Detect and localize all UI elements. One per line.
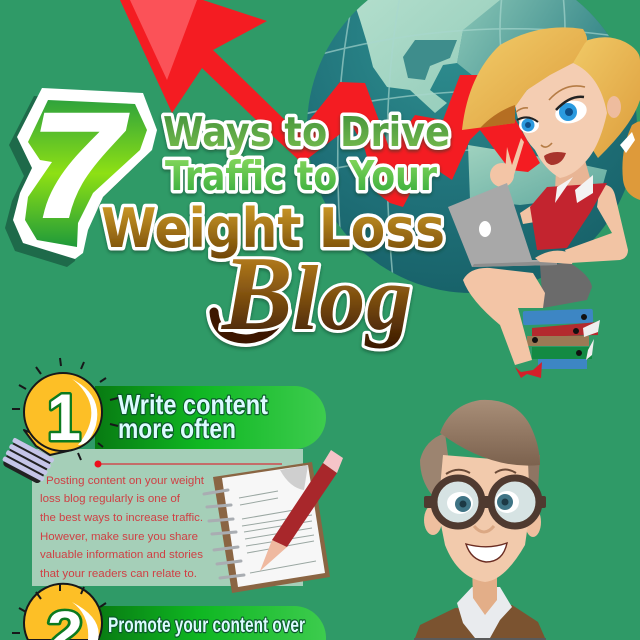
mouth [544,152,566,165]
vest [415,605,545,638]
step one bar [95,386,326,449]
back hair [420,433,450,495]
step one body text: valuable information and stories [40,549,204,561]
step one body text: Posting content on your weight [46,475,204,487]
eyebrows [446,470,516,474]
stack of binders [523,309,600,369]
step one body text: that your readers can relate to. [40,568,197,580]
step two bar [95,606,326,640]
title script word: Blog [221,235,413,352]
shirt and collar [457,587,512,638]
woman with laptop [448,27,640,378]
screw base [0,437,55,485]
connector line with red dot [94,460,282,468]
red top [530,183,607,250]
numeral one: 1 [47,380,81,454]
pencil [260,450,343,571]
rays [12,583,106,633]
back hair and ponytail [560,37,640,158]
step two heading: Promote your content over [108,614,305,637]
red shoes [515,362,542,378]
title line two: Traffic to Your [165,152,438,200]
mouth [466,543,507,562]
step one heading: Write content [118,389,268,420]
raised hand [490,138,524,187]
bottom shadow strip [414,638,546,640]
eyebrows and nose [516,86,585,147]
ear [607,96,621,118]
title line one: Ways to Drive [163,108,450,156]
ears [424,505,442,535]
title [101,108,450,352]
red rising arrow [120,0,540,207]
step one body text: the best ways to increase traffic. [40,512,203,524]
swash of script word [214,312,284,339]
icon: light bulb one [0,358,118,485]
laptop [448,183,575,267]
globe [300,0,640,300]
right eye [553,97,589,127]
collar [555,175,593,203]
title line three: Weight Loss [101,197,445,260]
neck [472,565,497,615]
nose [474,526,494,532]
step one body text: However, make sure you share [40,531,198,543]
number seven badge [5,81,157,267]
step one text panel [32,449,303,586]
step one body text [40,475,204,580]
glasses [424,478,546,526]
step one body text: loss blog regularly is one of [40,493,181,505]
digit seven: 7 [30,81,129,249]
icon: notebook and pencil [204,450,343,593]
step one bar: more often [118,413,236,444]
icon: light bulb two [12,583,106,640]
arm [565,185,628,263]
man with glasses [414,400,546,640]
rays [12,358,118,460]
legs [463,268,545,365]
skirt [540,263,592,308]
hair fringe [462,27,587,130]
face [438,455,530,582]
hair top [440,400,540,466]
face [515,63,607,178]
neck [555,160,590,198]
left eye [517,117,539,133]
